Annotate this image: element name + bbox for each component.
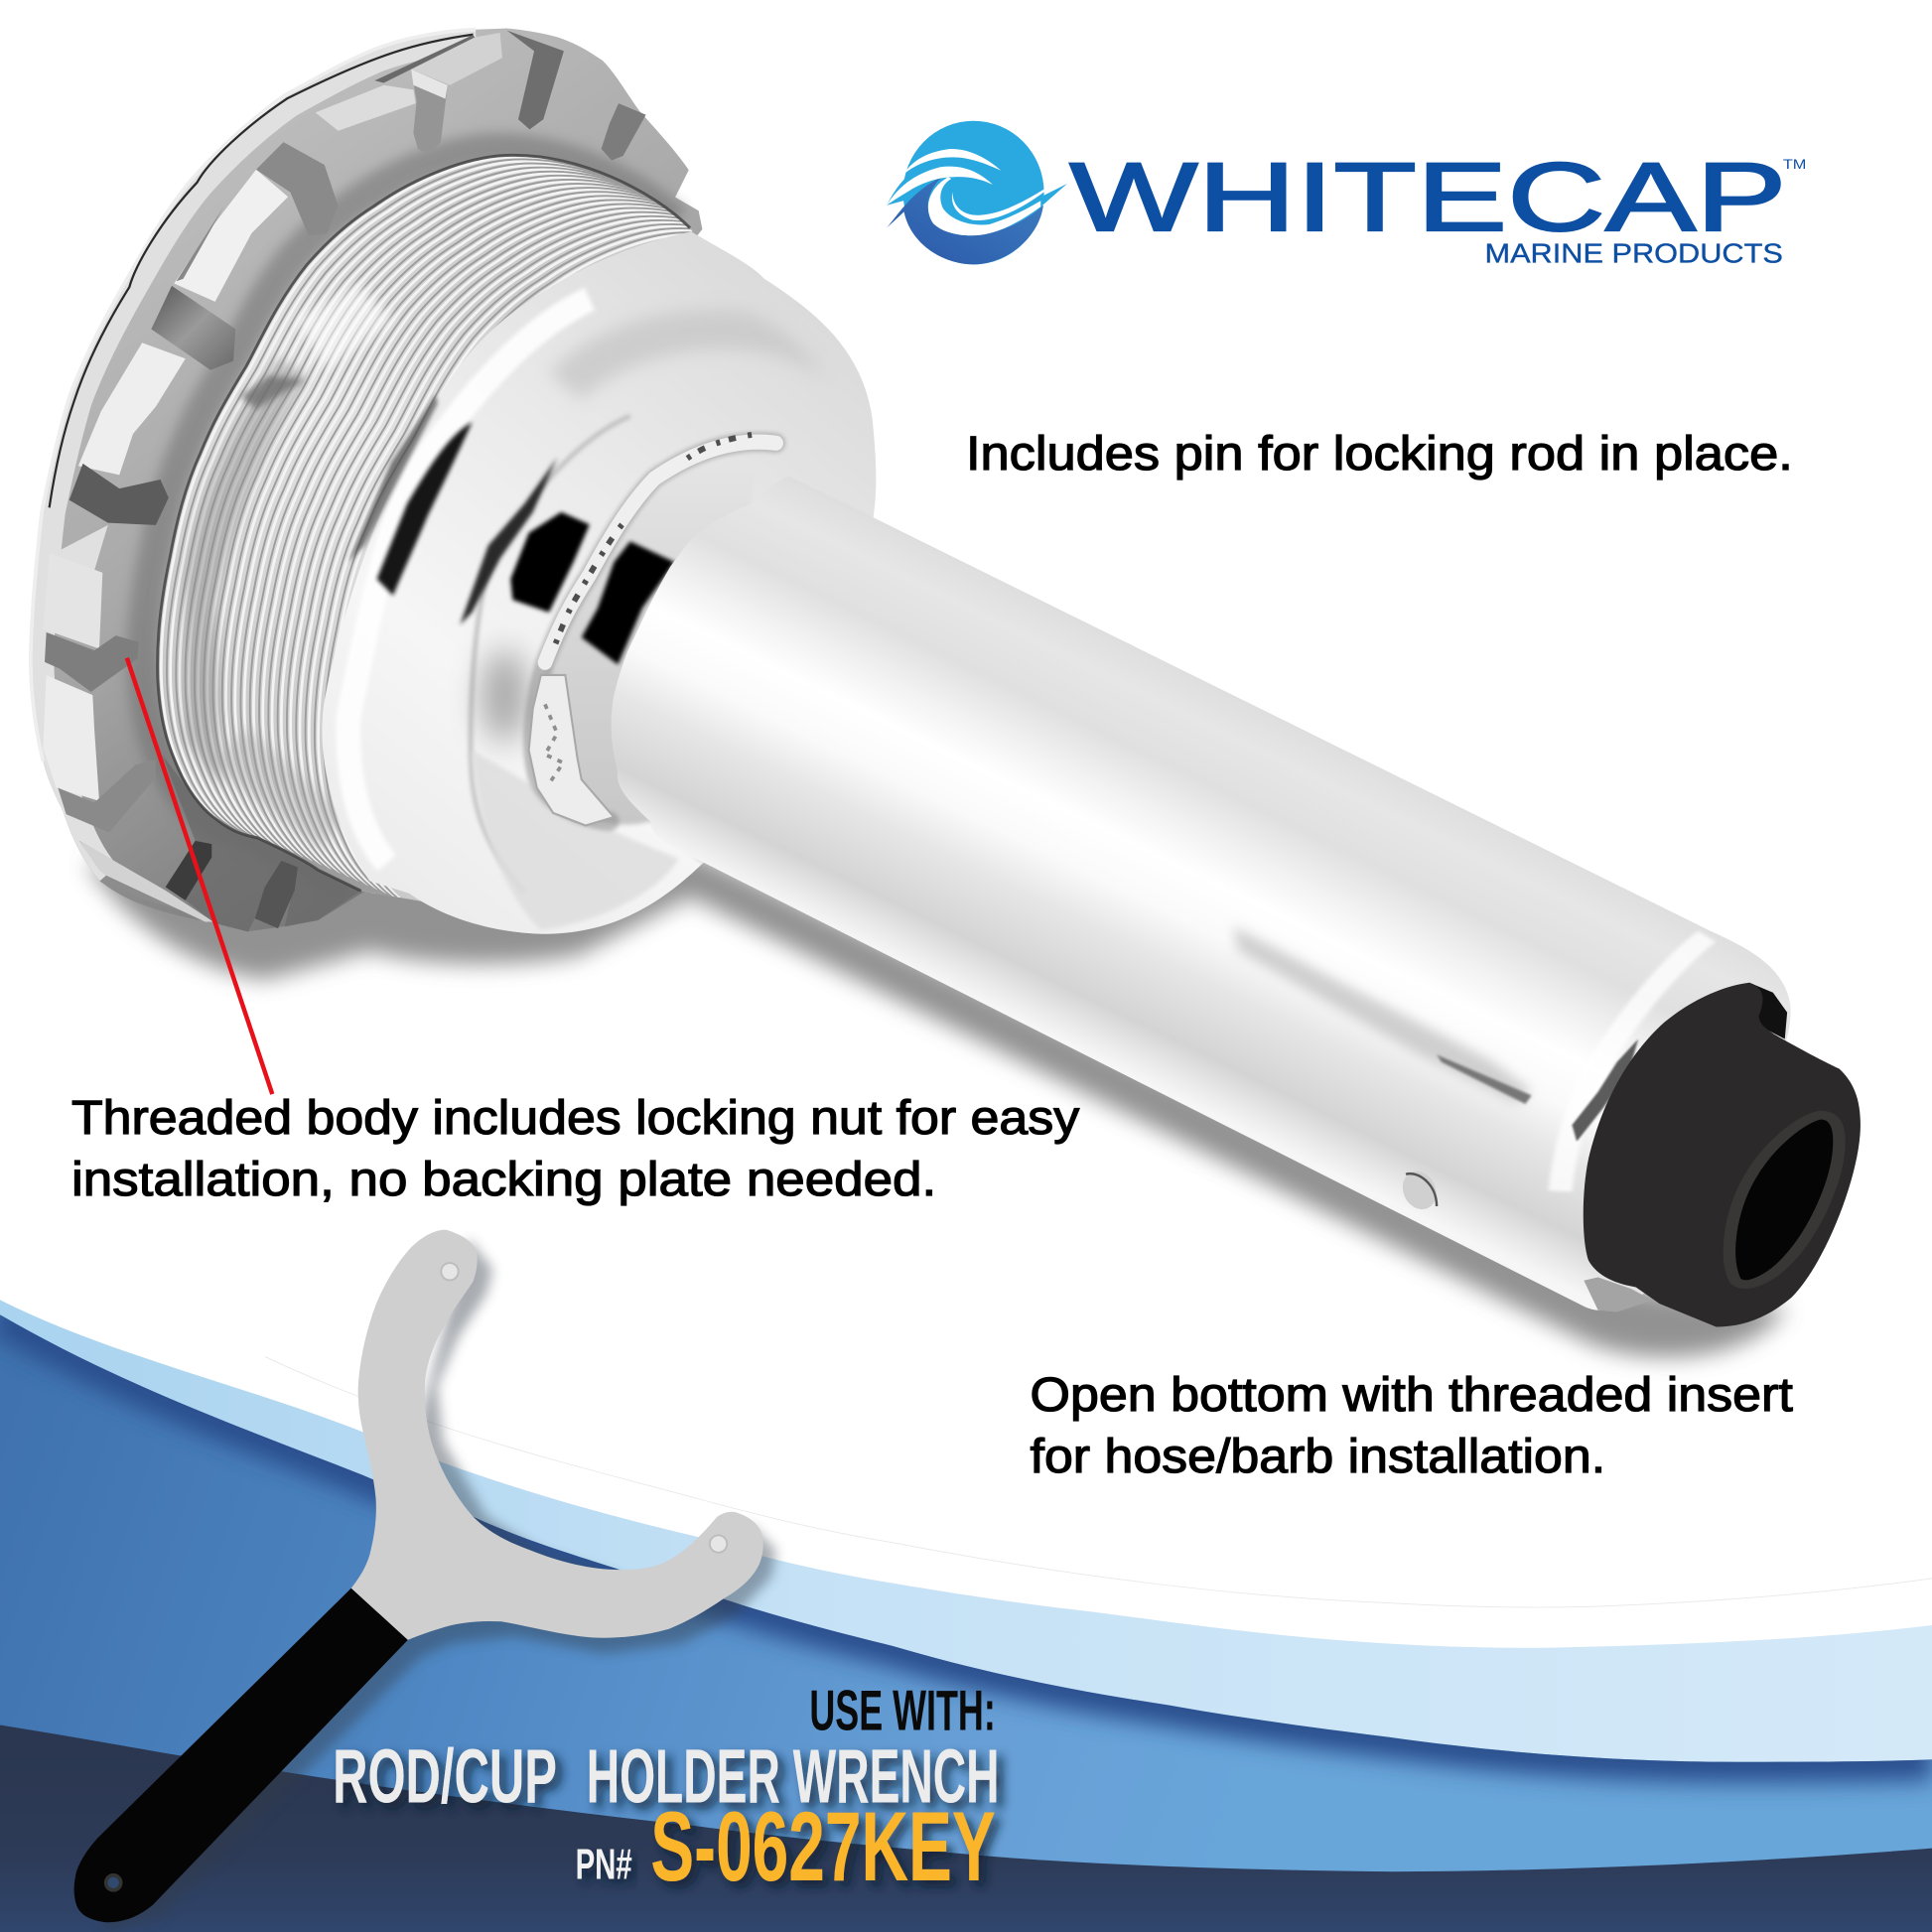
mid blue wave [0,1314,1932,1872]
emblem left cyan tip [887,167,943,206]
wrench handle hole [106,1875,121,1890]
wrench [74,1230,776,1932]
inner ring edge [471,416,630,893]
weld lower texture [545,704,563,783]
emblem blue lower wave [887,176,1043,264]
callout: threaded body: Threaded body includes locking nut for easy [71,1091,1080,1145]
callout: open bottom: Open bottom with threaded insert [1031,1368,1793,1422]
callout: locking pin: Includes pin for locking rod in place. [966,427,1793,481]
red callout line [127,658,272,1094]
tube [612,476,1861,1326]
notch 3 top face [411,69,448,99]
notch 3 [411,69,448,154]
logo wordmark: WHITECAP [1069,142,1787,251]
flange silhouette [31,29,702,931]
tube body [612,476,1791,1311]
use with heading: USE WITH: [809,1679,996,1742]
notch 2 [602,103,646,161]
flange outer white rim [31,30,476,761]
shoulder collar [322,231,876,934]
lower bright edge [62,811,213,922]
weld lower blob [529,675,614,825]
thin grey wave line [265,1356,1932,1607]
rim dark crescent [1572,1038,1638,1142]
wrench silver head [351,1230,763,1640]
facet lower left [43,675,99,801]
weld shadow [533,442,776,821]
part number: S-0627KEY [650,1792,996,1902]
logo emblem [887,121,1067,264]
insert body [1584,983,1861,1326]
callout: open bottom [1031,1368,1793,1483]
weld upper bead [545,442,776,662]
emblem right cyan slivers [1040,184,1067,207]
thread cylinder [158,155,788,918]
flange dark rim line [50,35,474,507]
bright facets [56,33,502,643]
thin dark thread-end line [348,395,438,562]
black weld reflection [510,512,590,613]
light blue wave [0,1300,1932,1932]
notch 8 [58,759,156,833]
notch 4 [256,142,339,235]
weld bead [529,435,776,825]
lower disc tone [472,751,679,930]
notch 1 [507,31,564,129]
thread highlight ridges [160,157,693,897]
wrench name: HOLDER WRENCH [587,1734,1000,1820]
flange inner annulus shading [143,149,675,885]
upper groove [374,35,475,82]
wrench name [333,1734,1000,1820]
trademark: TM [1783,157,1806,172]
wrench pin right [710,1535,727,1553]
lower rim [1584,1277,1652,1311]
wrench pin top [441,1263,459,1280]
thread edge shadow [158,155,690,891]
flange bright outer band [31,30,476,881]
notch 7 [45,632,139,692]
insert lip [1729,1115,1840,1285]
collar details [348,299,825,930]
product: rod holder [31,29,1861,1357]
flange bottom details [43,553,360,932]
locking pin [1397,1166,1443,1215]
callout: threaded body: installation, no backing plate needed. [71,1153,936,1206]
tube grey streak [1233,926,1532,1103]
wrench black handle [74,1588,408,1922]
navy wave [0,1725,1932,1932]
dark slim triangle [177,206,224,281]
emblem cyan disc [903,121,1044,264]
emblem big white swirl [928,177,1067,235]
notch 5 [151,286,235,370]
tube end details [1561,936,1861,1326]
emblem upper white swoosh [904,149,1001,174]
fillet around tube [534,463,756,863]
dark band reflection [460,458,557,624]
part number label: PN# [576,1842,632,1889]
product shadow [86,850,1787,1357]
thread dark ridges [158,155,693,897]
dark lower face [162,755,360,932]
logo subtitle: MARINE PRODUCTS [1484,237,1783,268]
wave background [0,1300,1932,1932]
tube dark reflection [1437,1054,1532,1104]
logo: Whitecap Marine Products [887,121,1806,268]
white ring band [348,299,590,863]
notch 10 [255,861,298,928]
black tube reflection [582,541,675,664]
facet left [43,553,102,648]
lower face grey patch [481,650,529,742]
collar body [322,231,876,934]
dark crescent reflection [377,422,472,596]
lower rim facet [79,841,213,922]
notch 9 [166,841,211,900]
upper shoulder shading [549,310,825,399]
thread grime shading [185,283,394,850]
callout: open bottom: for hose/barb installation. [1031,1430,1605,1483]
flange with notches [31,29,702,932]
flange top details [56,31,646,643]
insert back gap [1749,983,1787,1038]
notch 6 [69,464,169,525]
wrench name: ROD/CUP [333,1734,557,1820]
end rim highlight [1561,936,1707,1191]
emblem middle white swoosh [887,167,993,206]
weld texture [553,435,752,650]
threaded body [156,153,693,901]
callout: threaded body [71,1091,1080,1206]
emblem white crescent [952,179,1060,220]
wrench shadow [104,1238,776,1932]
